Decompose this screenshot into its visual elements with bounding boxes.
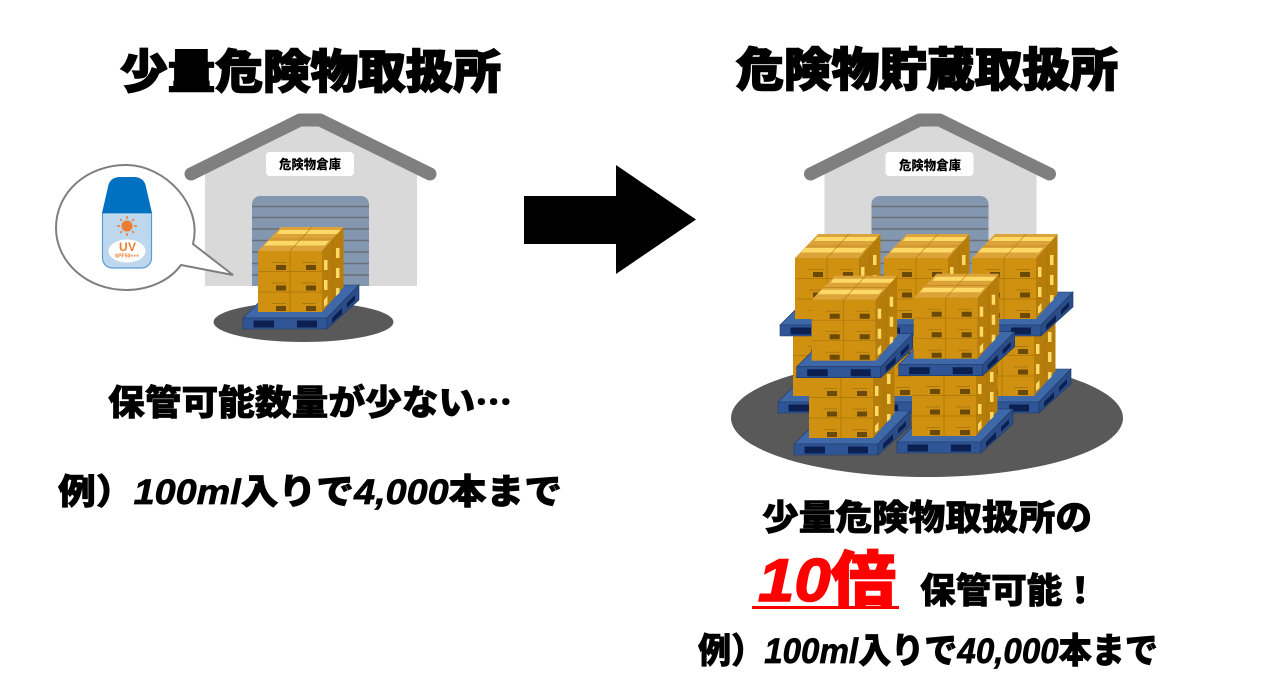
title: storage facility: 危険物貯蔵取扱所: [736, 44, 1118, 96]
left warehouse building: [191, 115, 430, 286]
sunscreen bottle body: [102, 213, 152, 268]
bubble outline: [56, 165, 233, 290]
right example: 例）100ml入りで40,000本まで: [698, 632, 1158, 671]
SPF text: SPF50+++: [115, 254, 139, 260]
icon: sun: [117, 216, 137, 236]
left caption: limited quantity: 保管可能数量が少ない …: [108, 375, 512, 426]
sunscreen bottle cap: [102, 177, 152, 213]
back lower middle stack: [867, 311, 983, 413]
label oval: [108, 240, 146, 262]
front upper left stack: [797, 276, 913, 378]
speech bubble with sunscreen: [56, 165, 233, 290]
back upper middle stack: [869, 234, 985, 336]
front lower left stack: [794, 353, 910, 455]
title: small-quantity facility: 少量危険物取扱所: [120, 46, 501, 98]
back lower right stack: [955, 311, 1071, 413]
left example: 例）100ml入りで4,000本まで: [58, 473, 562, 512]
right caption: storable: 保管可能！: [920, 563, 1098, 614]
emphasis underline: [752, 606, 899, 609]
UV text: U V: [119, 240, 136, 254]
right caption line 1: 少量危険物取扱所の: [762, 499, 1092, 538]
front lower right stack: [897, 351, 1013, 453]
left pallet with boxes: [243, 227, 359, 329]
back lower left stack: [778, 311, 894, 413]
right floor shadow: [731, 359, 1123, 477]
pallet stacks: [778, 234, 1073, 455]
right warehouse sign: 危険物倉庫: [899, 158, 961, 173]
left warehouse sign: 危険物倉庫: [279, 157, 341, 172]
back upper left stack: [780, 234, 896, 336]
arrow: [524, 165, 696, 274]
10x emphasis: 10倍: [758, 547, 896, 614]
left floor shadow: [214, 302, 394, 342]
right warehouse building: [810, 115, 1050, 286]
back upper right stack: [957, 234, 1073, 336]
front upper right stack: [899, 274, 1015, 376]
